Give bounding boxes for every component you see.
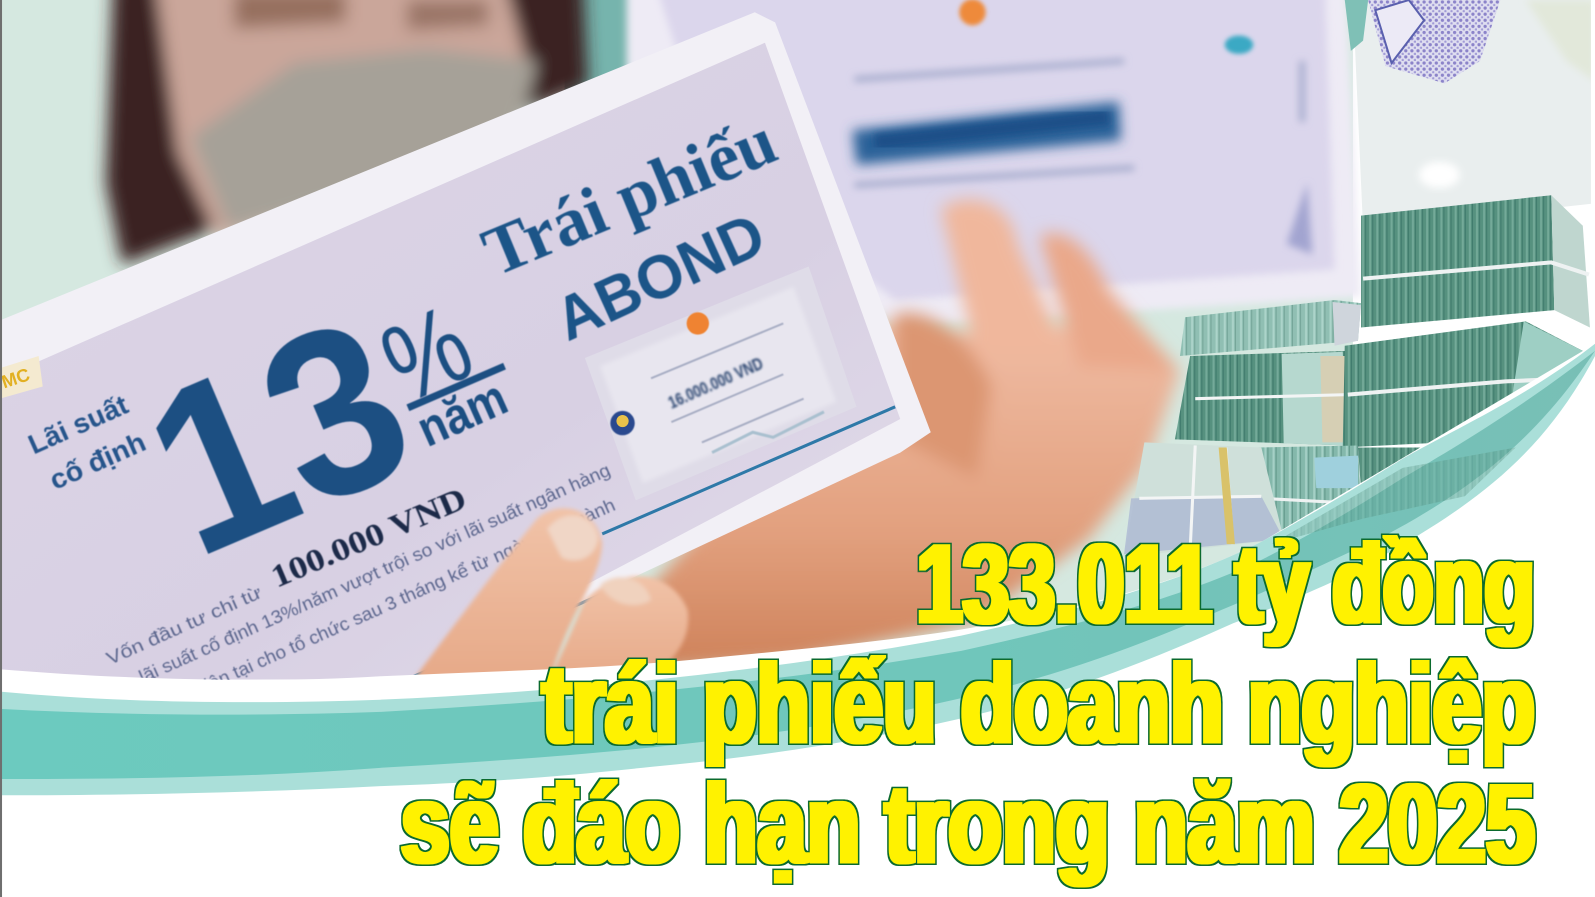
leaflet small print: lãi suất cố định 13%/năm vượt trội so với lãi suất ngân hàng bbox=[135, 459, 613, 687]
lilac leaflet face bbox=[0, 43, 900, 679]
label: fixed interest: Lãi suất bbox=[23, 389, 133, 460]
background wall bbox=[0, 0, 1353, 681]
leaflet small print: hiện tại cho tổ chức sau 3 tháng kể từ ngày phát hành bbox=[191, 494, 618, 699]
woman in mask bbox=[106, 0, 588, 264]
leaflet small print: Vốn đầu tư chỉ từ bbox=[103, 581, 265, 669]
price: 100.000 VND: 100.000 VND bbox=[266, 481, 471, 594]
label: fixed interest: cố định bbox=[45, 426, 150, 496]
left border line bbox=[0, 0, 2, 897]
title bbox=[401, 521, 1535, 886]
light upper and lower band bbox=[0, 344, 1595, 795]
figure: 13 percent per year: năm bbox=[409, 368, 515, 458]
bond leaflet held in hand bbox=[0, 12, 931, 699]
icon: thumb and finger holding leaflet bbox=[412, 508, 688, 681]
teal swoosh band bbox=[0, 344, 1595, 795]
leaflet rule lines bbox=[407, 407, 895, 679]
yellow logo tab bbox=[0, 356, 43, 399]
white curved band bbox=[0, 344, 1595, 897]
mini certificate on leaflet bbox=[585, 266, 856, 500]
heading: Trái phiếu ABOND: Trái phiếu bbox=[472, 101, 787, 290]
mini certificate on leaflet: 16.000.000 VND bbox=[665, 353, 766, 412]
figure: 13 percent per year: % bbox=[365, 282, 489, 427]
blurred certificate bbox=[627, 0, 1361, 325]
money stack seen through band bbox=[1272, 447, 1516, 544]
icon: stacks of banknotes bbox=[1124, 195, 1590, 557]
heading: Trái phiếu ABOND: ABOND bbox=[545, 200, 775, 354]
figure: 13 percent per year: 13 bbox=[112, 266, 444, 606]
label: fixed interest bbox=[23, 389, 150, 496]
blurred hand and palm bbox=[570, 200, 1180, 676]
main teal band bbox=[0, 351, 1595, 779]
banknote backdrop top right bbox=[1345, 0, 1595, 897]
paper stack edge bbox=[0, 12, 931, 683]
